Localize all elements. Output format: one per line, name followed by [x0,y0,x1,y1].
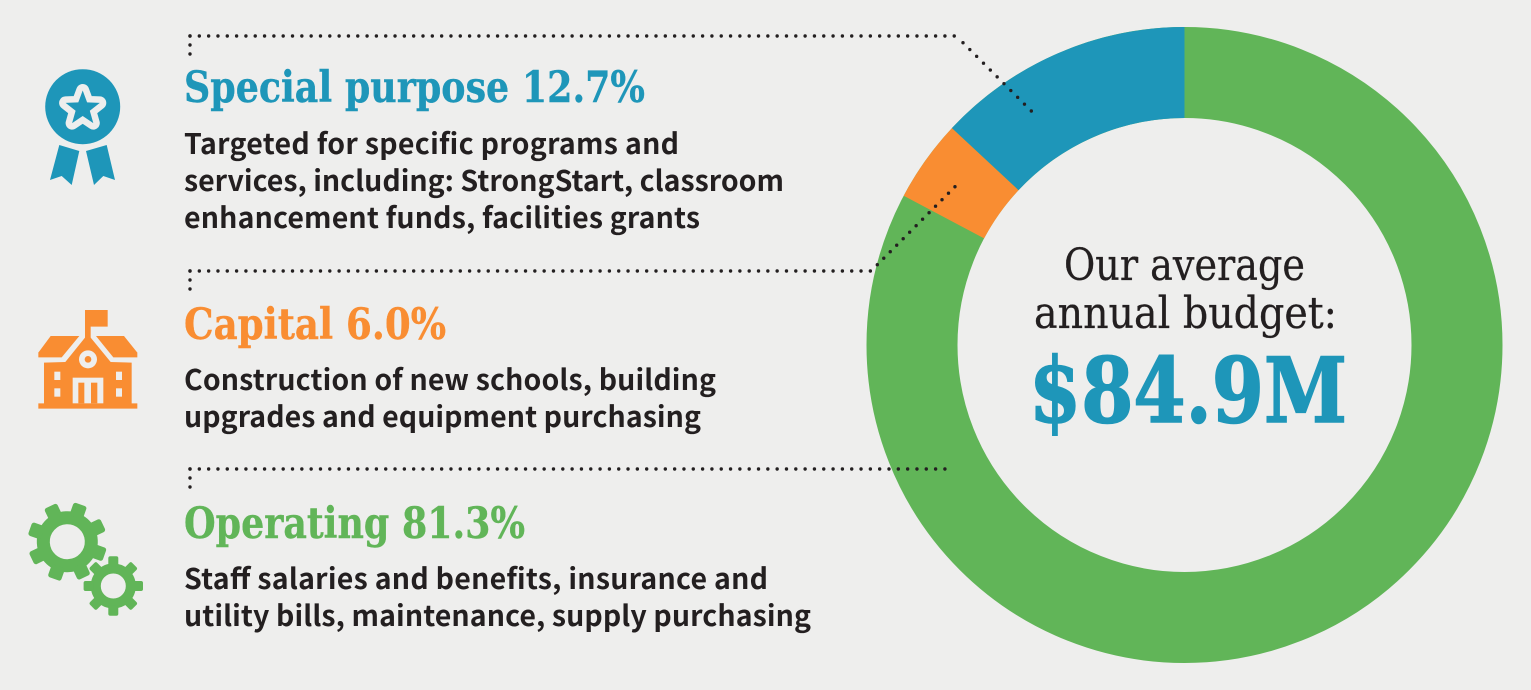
segment: special purpose 12.7% [952,27,1184,190]
segment: operating 81.3% [912,72,1457,618]
budget amount: $84.9M [1029,338,1347,444]
block: capital [184,300,716,436]
large gear [26,501,108,583]
dotted leader: special purpose [190,36,1032,112]
description: capital: Construction of new schools, building [184,358,716,399]
caption: our average annual budget: annual budget: [1034,288,1337,339]
heading: special purpose: Special purpose 12.7% [184,63,645,113]
icon: award ribbon [45,69,120,185]
small gear [84,556,143,616]
icon: gears [26,501,143,616]
description: operating [184,557,811,635]
dotted leader: operating [190,469,946,488]
caption: our average annual budget: Our average [1064,240,1305,291]
description: special purpose: Targeted for specific programs and [184,122,679,163]
heading: operating: Operating 81.3% [184,499,525,549]
description: operating: Staff salaries and benefits, insurance and [184,557,768,598]
segment: capital 6.0% [904,128,1018,238]
icon: school building [38,310,137,409]
block: operating [184,499,811,635]
centre label [1029,240,1347,444]
description: operating: utility bills, maintenance, supply purchasing [184,594,811,635]
description: special purpose [184,122,784,237]
heading: capital: Capital 6.0% [184,300,446,350]
block: special purpose [184,63,784,237]
description: capital [184,358,716,436]
caption: our average annual budget [1034,240,1337,339]
donut chart [904,27,1457,617]
description: capital: upgrades and equipment purchasing [184,395,701,436]
description: special purpose: enhancement funds, facilities grants [184,196,700,237]
dotted leader: capital [190,186,955,290]
description: special purpose: services, including: StrongStart, classroom [184,159,784,200]
